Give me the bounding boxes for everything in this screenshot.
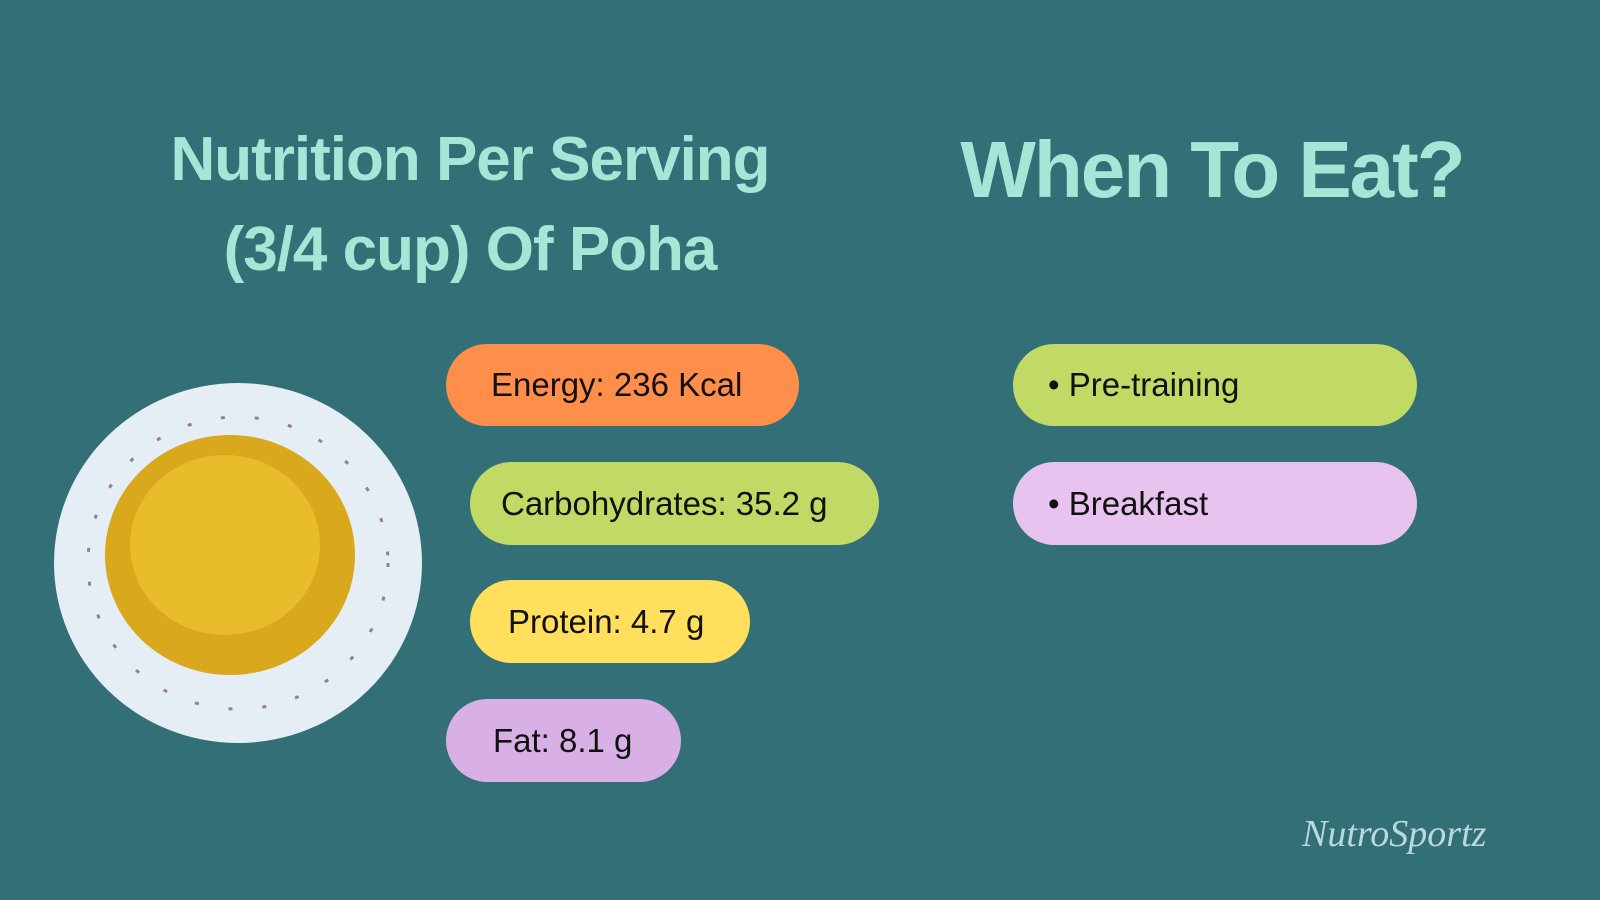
pill: pre-training <box>1013 344 1417 426</box>
pill: energy: Energy: 236 Kcal <box>491 366 742 403</box>
pill: protein: Protein: 4.7 g <box>508 602 704 640</box>
pill: carbohydrates: Carbohydrates: 35.2 g <box>501 484 828 522</box>
title: nutrition per serving <box>170 125 770 284</box>
pill: carbohydrates <box>470 462 879 545</box>
title: nutrition per serving: Nutrition Per Serving <box>170 125 770 194</box>
pill: breakfast <box>1013 462 1417 545</box>
pill: energy <box>446 344 799 426</box>
pill: breakfast: • Breakfast <box>1048 484 1208 522</box>
title: nutrition per serving: (3/4 cup) Of Poha <box>224 215 716 284</box>
pill: protein <box>470 580 750 663</box>
logo: NutroSportz: NutroSportz <box>1302 813 1486 855</box>
pill: fat: Fat: 8.1 g <box>493 722 632 758</box>
pill: pre-training: • Pre-training <box>1048 366 1239 403</box>
pill: fat <box>446 699 681 782</box>
title: when to eat: When To Eat? <box>960 125 1464 214</box>
image: plate of poha <box>54 383 422 743</box>
